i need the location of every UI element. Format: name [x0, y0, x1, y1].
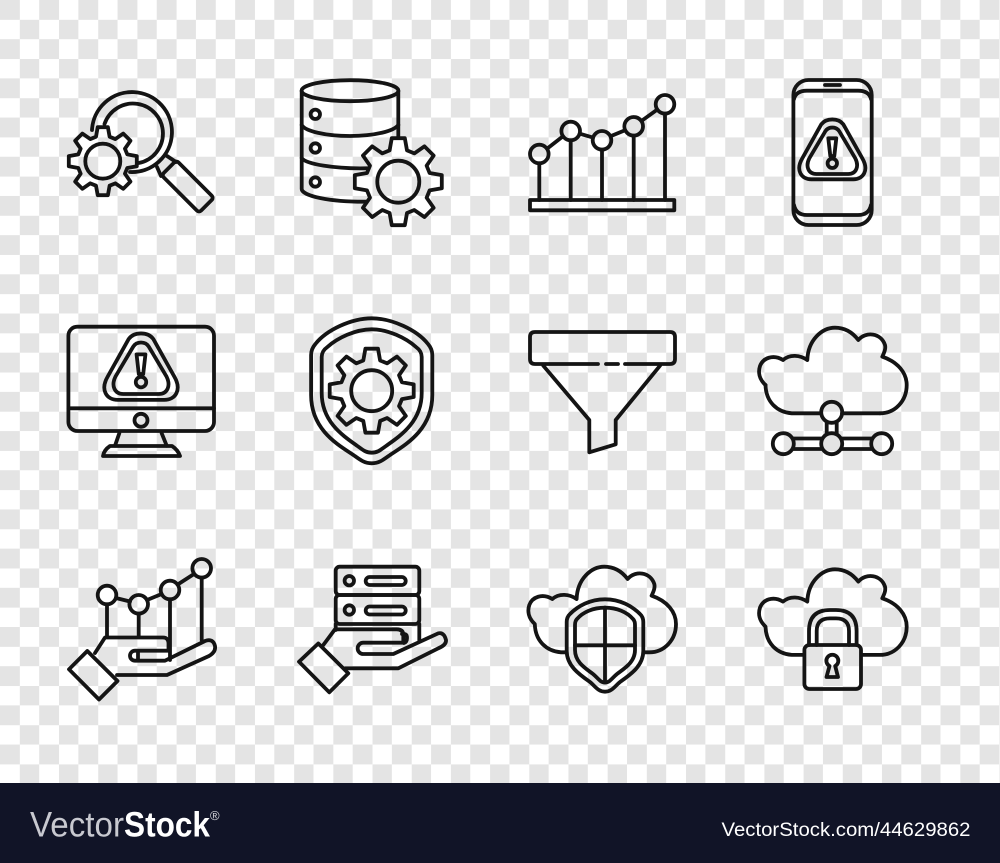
footer logo: ®: [210, 808, 220, 823]
footer logo: Vector: [30, 806, 124, 845]
icon: shield with gear: [311, 318, 432, 463]
icon: funnel: [530, 332, 675, 452]
footer logo: Stock: [124, 806, 210, 845]
icon: cloud network: [759, 328, 907, 454]
icon: line chart on base: [530, 95, 674, 210]
icon: cloud with padlock: [759, 569, 907, 689]
icon: database with gear: [302, 80, 442, 225]
icon: hand holding server: [299, 567, 446, 692]
footer logo: [30, 806, 220, 845]
icon: magnifier with gear: [69, 92, 214, 213]
icon: hand holding chart: [69, 559, 215, 700]
icon: monitor with warning: [68, 327, 214, 456]
footer band: [0, 783, 1000, 863]
icon: smartphone with warning: [793, 80, 872, 225]
footer image id: VectorStock.com/44629862: [722, 819, 970, 841]
icon: cloud with shield: [528, 567, 676, 692]
